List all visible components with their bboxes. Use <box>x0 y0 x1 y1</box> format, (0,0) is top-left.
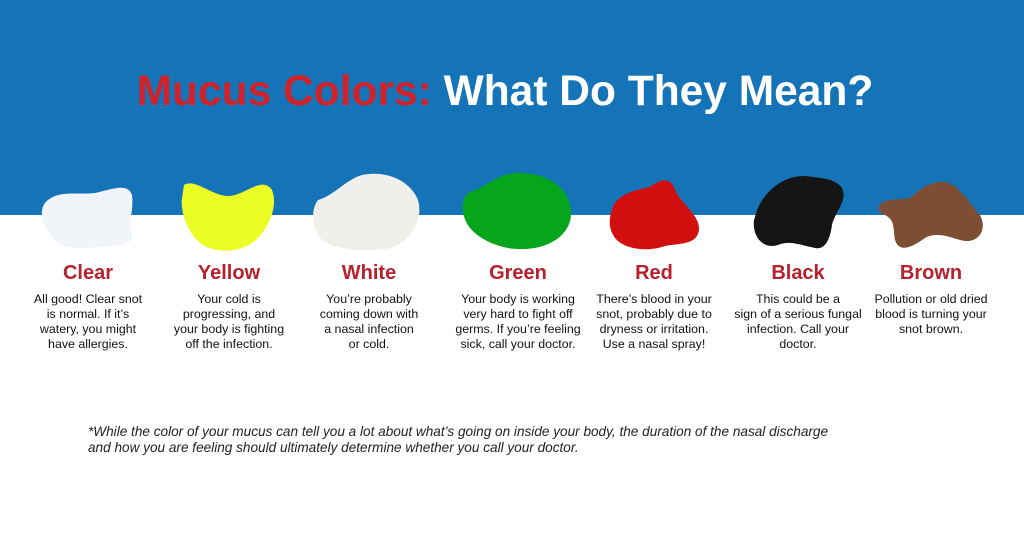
column: green: sick, call your doctor. <box>460 337 576 351</box>
column: clear <box>34 262 142 351</box>
icon: clear blob <box>42 188 132 248</box>
column: white: a nasal infection <box>324 322 414 336</box>
column: brown: blood is turning your <box>875 307 987 321</box>
column: red: There’s blood in your <box>596 292 712 306</box>
column: black: infection. Call your <box>747 322 849 336</box>
column: brown <box>875 262 987 336</box>
footnote: *While the color of your mucus can tell you a lot about what’s going on inside your body, the duration of the nasal discharge <box>88 424 828 439</box>
column: green <box>455 262 581 351</box>
column: white: or cold. <box>349 337 389 351</box>
icon: white blob <box>313 174 419 250</box>
column: red: dryness or irritation. <box>600 322 708 336</box>
column: black: doctor. <box>779 337 817 351</box>
column: red: Red <box>635 262 673 284</box>
column: yellow: off the infection. <box>185 337 273 351</box>
column: brown: Pollution or old dried <box>875 292 987 306</box>
icon: brown blob <box>878 182 983 248</box>
column: brown: Brown <box>900 262 962 284</box>
footnote: and how you are feeling should ultimately determine whether you call your doctor. <box>88 440 579 455</box>
column: yellow: Yellow <box>198 262 260 284</box>
column: green: Green <box>489 262 547 284</box>
column: yellow: your body is fighting <box>174 322 284 336</box>
column: black <box>734 262 862 351</box>
icon: black blob <box>754 176 844 248</box>
footnote <box>88 424 828 455</box>
column: white: White <box>342 262 396 284</box>
column: green: very hard to fight off <box>463 307 573 321</box>
column: green: germs. If you’re feeling <box>455 322 581 336</box>
column: black: Black <box>771 262 825 284</box>
column: brown: snot brown. <box>899 322 963 336</box>
column: green: Your body is working <box>461 292 575 306</box>
column: white: You’re probably <box>326 292 412 306</box>
column: white: coming down with <box>320 307 418 321</box>
title: Mucus Colors: What Do They Mean? <box>137 68 873 115</box>
column: clear: is normal. If it’s <box>47 307 129 321</box>
column: yellow: progressing, and <box>183 307 275 321</box>
column: black: sign of a serious fungal <box>734 307 862 321</box>
column: yellow: Your cold is <box>197 292 261 306</box>
icon: yellow blob <box>182 183 274 251</box>
icon: red blob <box>610 180 699 249</box>
column: white <box>320 262 418 351</box>
column: clear: All good! Clear snot <box>34 292 142 306</box>
column: yellow <box>174 262 284 351</box>
column: red: snot, probably due to <box>596 307 712 321</box>
column: clear: watery, you might <box>40 322 136 336</box>
icon: green blob <box>462 173 571 249</box>
column: red <box>596 262 712 351</box>
column: clear: Clear <box>63 262 113 284</box>
column: black: This could be a <box>756 292 840 306</box>
column: clear: have allergies. <box>48 337 128 351</box>
column: red: Use a nasal spray! <box>603 337 705 351</box>
